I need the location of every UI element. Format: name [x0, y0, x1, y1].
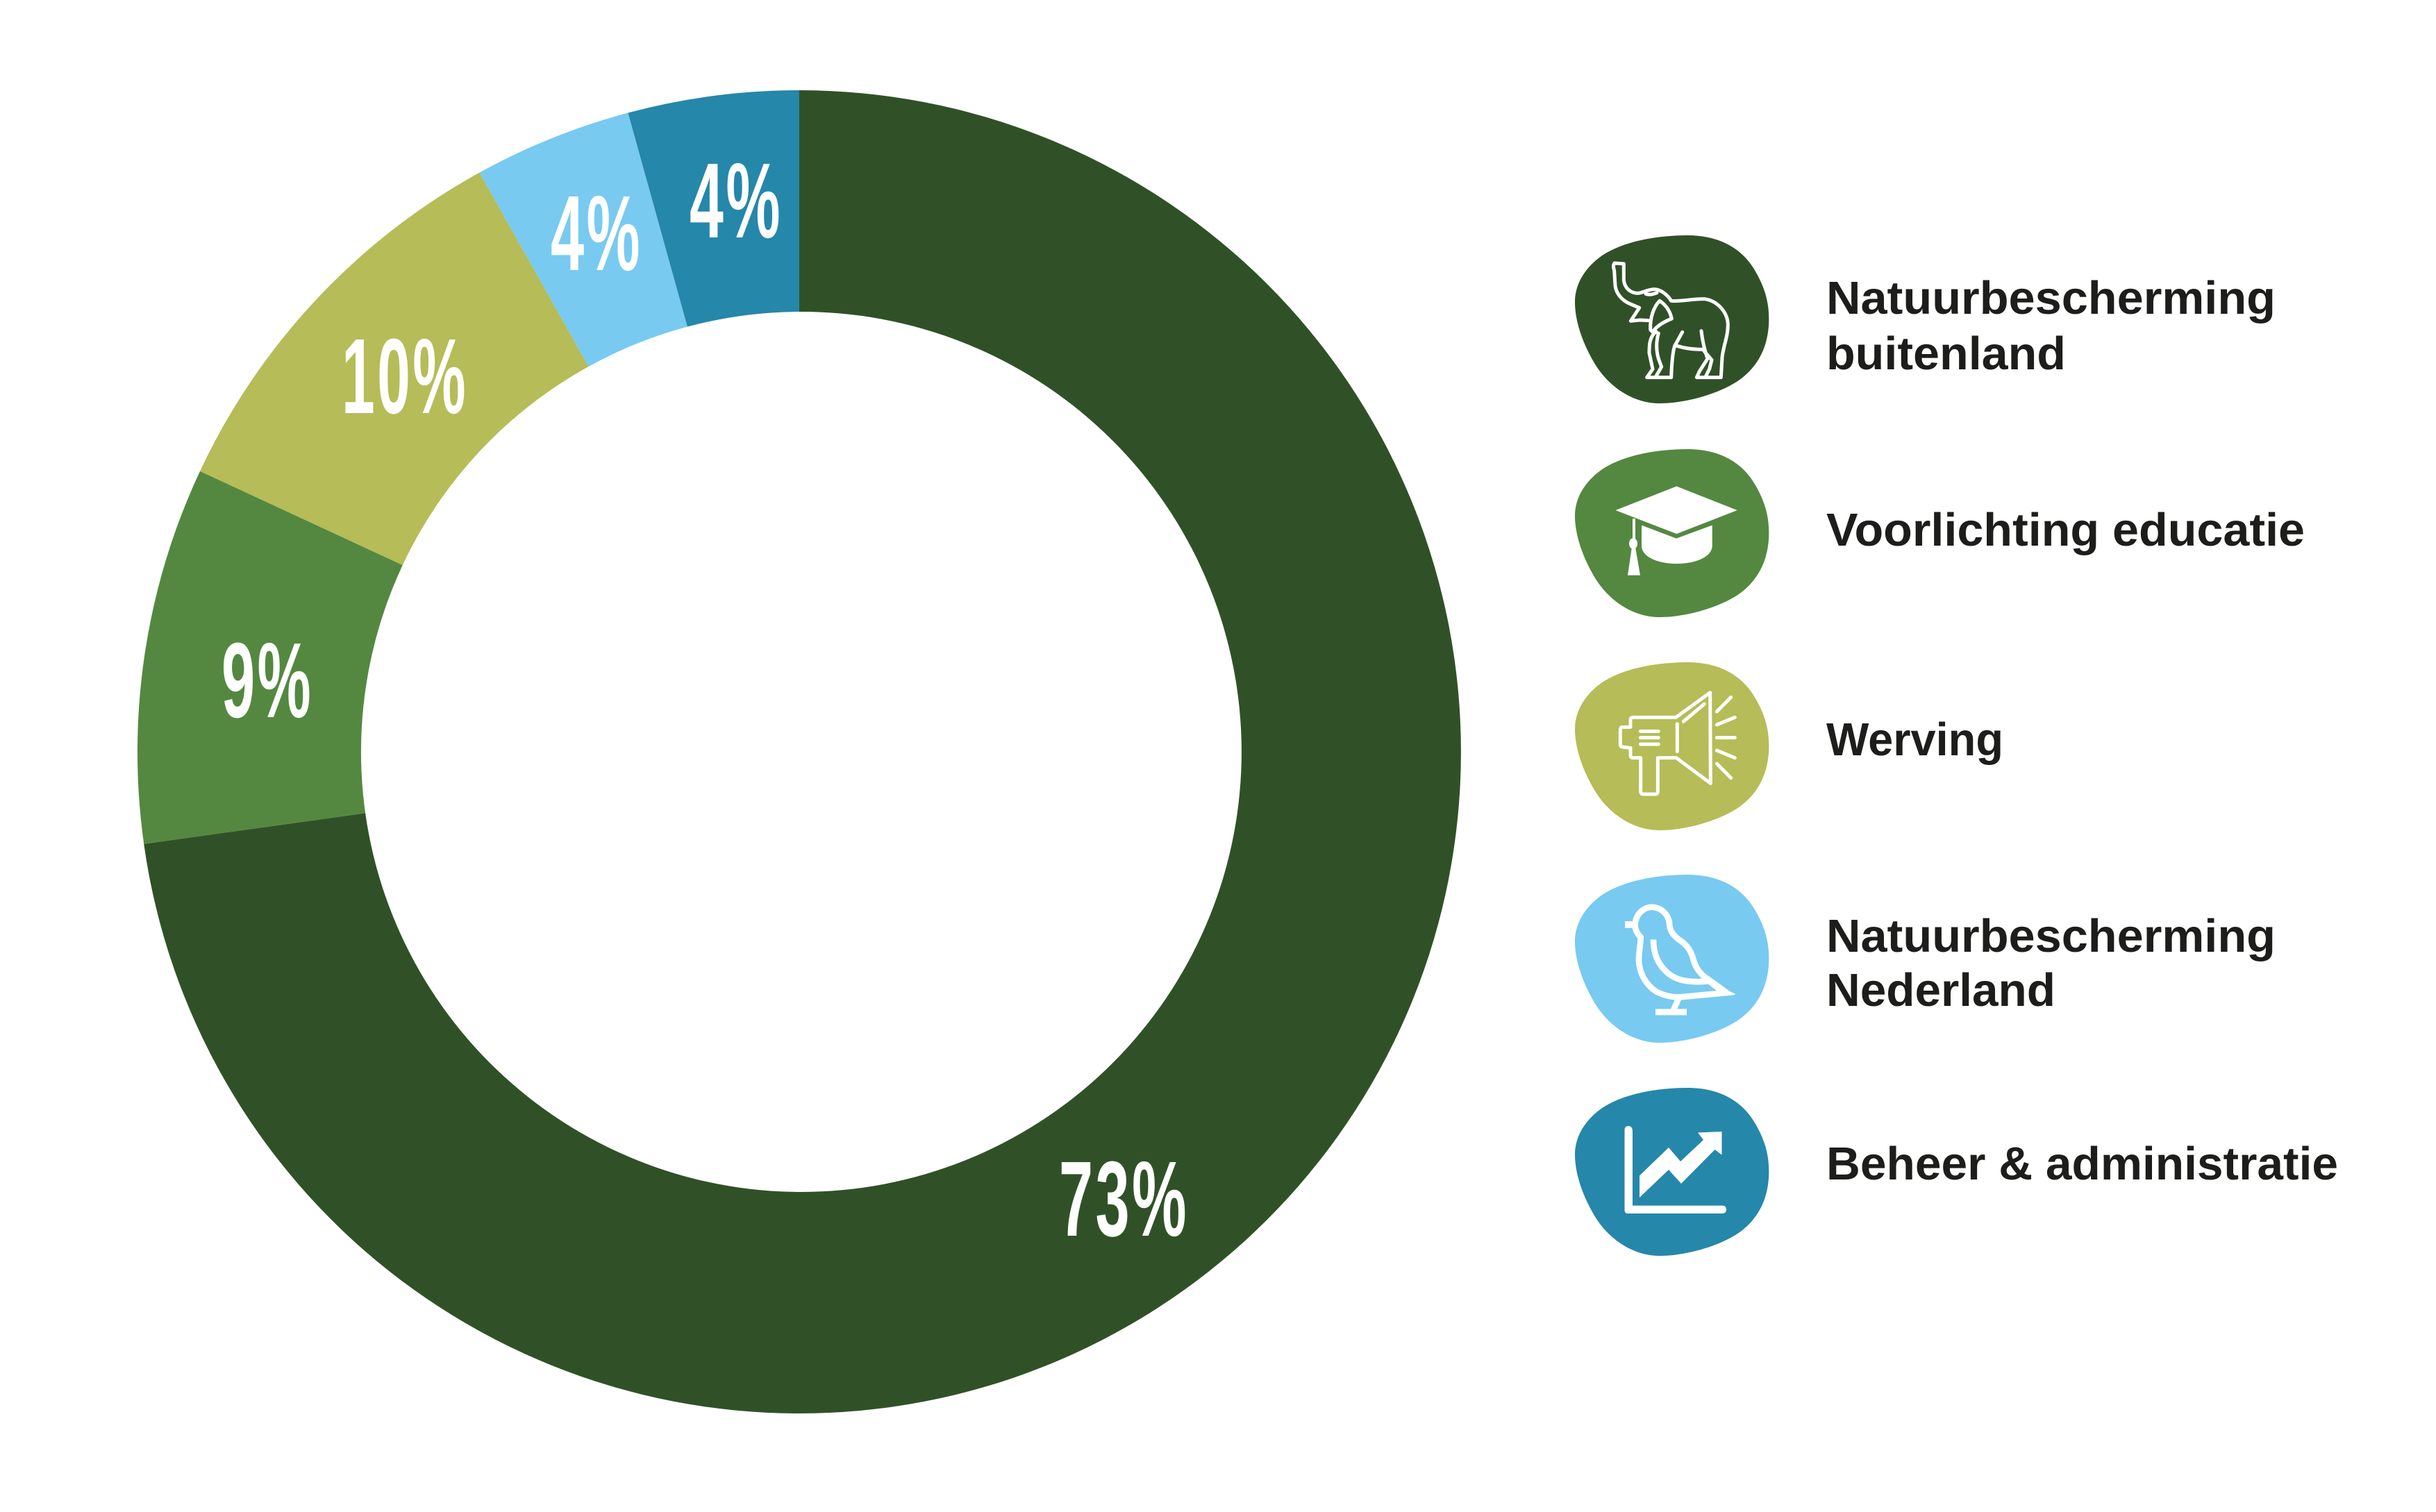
legend text: Werving [1826, 714, 2003, 766]
label 9%: 9% [222, 621, 313, 740]
segment: Werving 10% [200, 173, 589, 565]
icon: graduation cap [1575, 449, 1769, 617]
donut chart [137, 90, 1461, 1413]
legend text [1826, 272, 2276, 380]
segment: Beheer en administratie 4% [628, 90, 799, 327]
icon: megaphone [1575, 662, 1769, 830]
label 10%: 10% [342, 317, 468, 436]
legend item: Werving [1575, 662, 2003, 830]
label 73%: 73% [1059, 1139, 1189, 1259]
segment: Voorlichting educatie 9% [137, 471, 403, 844]
segment: Natuurbescherming Nederland 4% [479, 112, 687, 367]
legend [1575, 235, 2338, 1256]
legend item: Natuurbescherming buitenland [1575, 235, 2276, 403]
legend text: Natuurbescherming [1826, 272, 2276, 324]
legend item: Beheer & administratie [1575, 1088, 2338, 1256]
legend text: buitenland [1826, 328, 2066, 380]
legend item: Voorlichting educatie [1575, 449, 2305, 617]
legend text: Voorlichting educatie [1826, 504, 2305, 556]
legend text: Nederland [1826, 964, 2055, 1016]
legend text: Natuurbescherming [1826, 910, 2276, 962]
segment: Natuurbescherming buitenland 73% [144, 90, 1461, 1413]
label 4% blue: 4% [690, 141, 783, 260]
legend item: Natuurbescherming Nederland [1575, 875, 2276, 1043]
label 4% light blue: 4% [551, 174, 642, 293]
legend text [1826, 910, 2276, 1016]
icon: bird [1575, 875, 1769, 1043]
legend text: Beheer & administratie [1826, 1138, 2338, 1190]
icon: elephant [1575, 235, 1769, 403]
icon: growth chart [1575, 1088, 1769, 1256]
